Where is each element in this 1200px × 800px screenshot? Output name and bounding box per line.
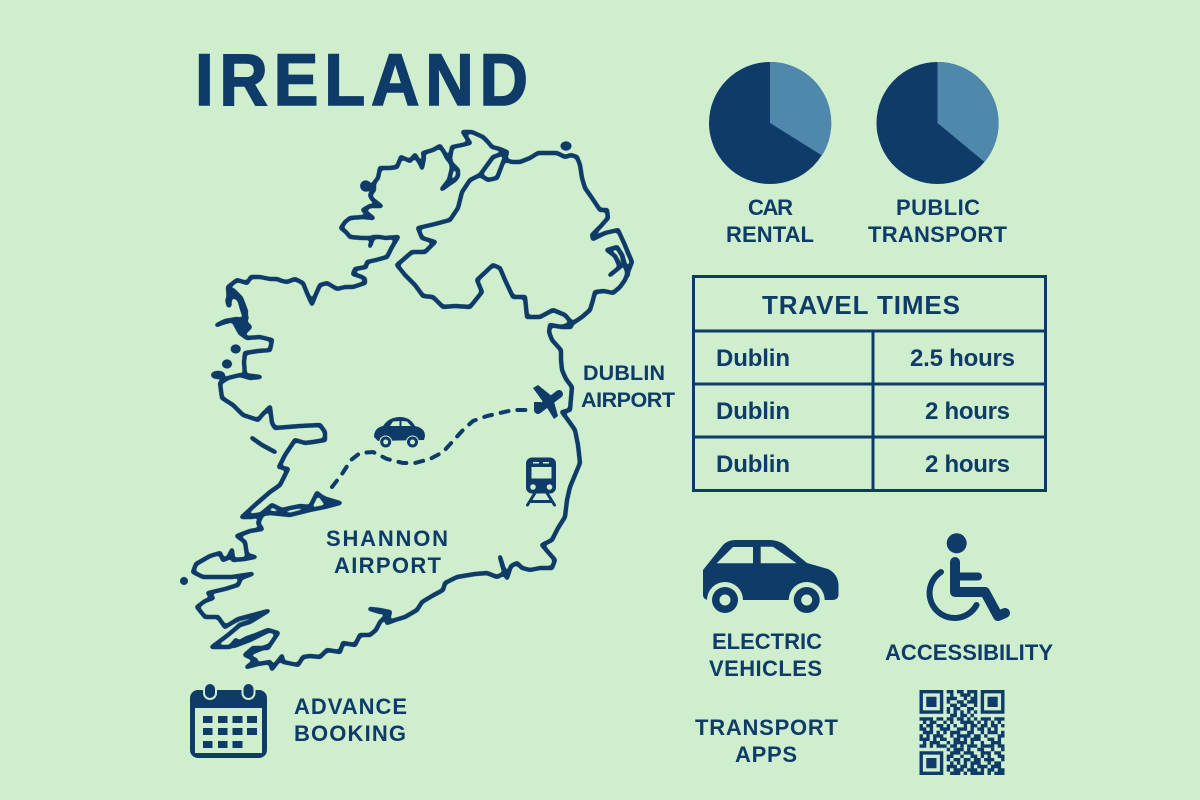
map of Ireland [182, 132, 632, 669]
travel times table [694, 276, 1046, 490]
row 2: Dublin [716, 398, 790, 425]
label: advance booking [294, 694, 407, 746]
label: electric vehicles: VEHICLES [709, 656, 822, 681]
label: transport apps: TRANSPORT [695, 715, 839, 740]
label: public transport: PUBLIC [896, 195, 980, 220]
Shannon estuary [242, 493, 340, 517]
label: Dublin Airport: AIRPORT [581, 388, 675, 412]
row 3: 2 hours [925, 451, 1010, 478]
label: Shannon Airport [326, 526, 448, 578]
icon: accessibility wheelchair [930, 533, 1005, 618]
icon: small car [374, 417, 425, 448]
label: car rental: CAR [748, 195, 793, 220]
label: advance booking: ADVANCE [294, 694, 407, 719]
QR code [920, 690, 1004, 775]
row 3: Dublin [716, 451, 790, 478]
label: advance booking: BOOKING [294, 721, 406, 746]
icon: plane [533, 385, 559, 419]
coastline [238, 132, 632, 669]
Strangford Lough [607, 247, 628, 275]
label: accessibility: ACCESSIBILITY [885, 640, 1053, 665]
pie chart: public transport [876, 62, 999, 184]
label: transport apps: APPS [735, 742, 797, 767]
table heading: TRAVEL TIMES [762, 290, 960, 320]
southwest coast peninsulas [193, 277, 325, 647]
label: Dublin Airport [581, 361, 675, 412]
label: Dublin Airport: DUBLIN [583, 361, 665, 385]
label: Shannon Airport: AIRPORT [334, 553, 442, 578]
label: public transport: TRANSPORT [868, 222, 1008, 247]
border with Northern Ireland [397, 152, 571, 327]
label: electric vehicles: ELECTRIC [712, 629, 822, 654]
label: public transport [868, 195, 1008, 247]
offshore islands [182, 144, 570, 655]
row 2: 2 hours [925, 398, 1010, 425]
label: Shannon Airport: SHANNON [326, 526, 448, 551]
label: electric vehicles [709, 629, 822, 681]
pie chart: car rental [709, 62, 831, 184]
icon: train [526, 458, 556, 505]
row 1 [716, 345, 1015, 372]
Lough Foyle [480, 152, 507, 180]
row 3 [716, 451, 1010, 478]
dashed route [332, 410, 528, 487]
row 2 [716, 398, 1010, 425]
icon: calendar [190, 683, 267, 758]
title: IRELAND [195, 39, 528, 121]
label: car rental: RENTAL [726, 222, 814, 247]
label: transport apps [695, 715, 839, 767]
icon: electric vehicle car [703, 540, 838, 618]
label: car rental [726, 195, 814, 247]
row 1: Dublin [716, 345, 790, 372]
row 1: 2.5 hours [910, 345, 1015, 372]
